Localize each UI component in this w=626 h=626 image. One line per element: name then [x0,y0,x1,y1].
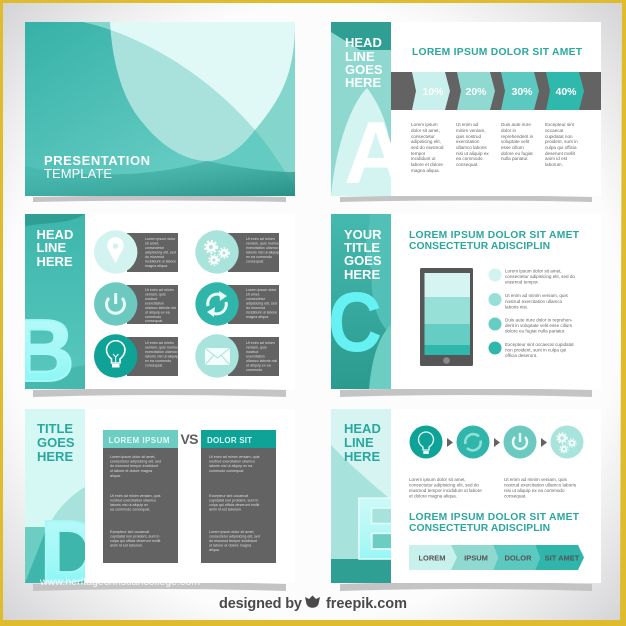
sidebar A [331,22,391,196]
comparison box: left: Ut enim ad minim veniam, quis [110,494,161,498]
column text A: nulla pariatur. [501,156,529,161]
legend list: nostrud exercitation ullamco [505,299,563,304]
item: mail: ullamco laboris nisi [246,359,277,363]
item: mail: ut aliquip ex ea [246,364,272,368]
column text A: consectetur [411,134,435,139]
item: refresh: magna aliqua. [246,315,269,319]
item: power: Ut enim ad minim [145,288,174,292]
item: settings: veniam, quis nostrud [246,242,280,246]
item: refresh: consectetur [246,297,266,301]
comparison box: left: cupidatat non proident, sunt in [110,534,159,538]
legend list: officia deserunt. [505,353,537,358]
column text A: labore et dolore [411,162,443,167]
legend list: Duis aute irure dolor in reprehen- [505,318,573,322]
chevron percentage band: 40% [555,86,577,98]
chevron percentage band [391,72,601,110]
item: settings: ex ea commodo [246,255,272,259]
item: power: nostrud [145,297,157,301]
paragraph text E: consectetur adipisicing elit, sed do [409,482,479,488]
legend list: eiusmod tempor. [505,280,539,284]
column text A: nisi ut aliquip ex [456,151,489,156]
comparison box: left: consectetur adipisicing elit, sed [110,460,161,464]
comparison box: right: do eiusmod tempor incididunt [209,539,257,543]
sidebar C: GOES [344,253,382,268]
sidebar A: GOES [345,62,383,77]
column text A: Lorem ipsum [411,122,438,127]
sidebar C: YOUR [344,227,382,242]
column text A: ea commodo [456,156,483,161]
comparison box: right: Excepteur sint occaecat [209,494,248,498]
sidebar A: A [344,103,408,202]
item: idea [94,334,179,378]
column text A: Ut enim ad [456,122,479,127]
column text A: dolor in [501,128,517,133]
item: power: ut aliquip ex ea [145,310,171,314]
sidebar D [25,409,85,583]
chevron percentage band: 10% [422,86,444,98]
column text A: dolore eu fugiat [501,151,533,156]
column text A: anim id est [545,156,568,161]
column text A: dolor sit amet, [411,128,440,133]
sidebar B: HEAD [36,227,73,242]
legend list: dolore eu fugiat nulla pariatur. [505,328,566,334]
heading E [409,512,580,534]
item: settings: laboris nisi ut aliquip [246,250,279,254]
item: location: sit amet, [145,242,159,246]
sidebar B: HERE [36,254,73,269]
panel shadow: cover [33,196,286,202]
panel: slide D [25,409,276,583]
comparison box: left: do eiusmod tempor incididunt [110,464,158,468]
paragraph text E: Lorem ipsum dolor sit amet, [409,477,466,482]
legend list: derit in voluptate velit esse cillum [505,323,572,328]
sidebar D: HERE [37,449,73,464]
sidebar A: HERE [345,75,381,90]
comparison box: right: cupidatat non proident, sunt in [209,498,258,502]
comparison box: left: Excepteur sint occaecat [110,530,149,534]
comparison box: left: anim id est laborum. [110,544,143,548]
legend list: laboris nisi. [505,304,528,310]
column text A: culpa qui officia [545,145,577,150]
heading E: LOREM IPSUM DOLOR SIT AMET [409,512,580,523]
heading E: CONSECTETUR ADISCIPLIN [409,523,550,534]
chevron percentage band: 30% [511,86,533,98]
heading C: CONSECTETUR ADISCIPLIN [409,241,550,252]
comparison box: right: Ut enim ad minim veniam, quis [209,455,260,459]
comparison box: left: laboris nisi ut aliquip ex [110,503,148,507]
panel shadow: C [340,388,592,397]
sidebar C [328,214,391,389]
legend list: non proident, sunt in culpa qui [505,348,566,352]
sidebar D: GOES [37,435,75,450]
item: mail: veniam, quis [246,346,267,350]
footer credit: freepik.com [326,596,407,612]
column text A: quis nostrud [456,134,481,139]
comparison box: left: ut labore et dolore magna [110,469,153,473]
paragraph text E: Ut enim ad minim veniam, quis [504,477,568,482]
column text A: adipisicing elit, [411,139,441,144]
sidebar E: LINE [344,435,374,450]
item: refresh [195,282,279,326]
sidebar B: LINE [36,240,66,255]
sidebar B: B [11,301,75,400]
comparison box: left: LOREM IPSUM [108,436,170,445]
paragraph text E: eiusmod tempor incididunt ut labore [409,488,482,493]
item: refresh: sit amet, [246,292,260,296]
sidebar C: TITLE [344,240,380,255]
footer credit [219,596,407,612]
column text A: reprehenderit in [501,134,534,139]
heading A: LOREM IPSUM DOLOR SIT AMET [412,47,583,58]
column text A: consequat. [456,162,478,167]
item: mail: commodo. [246,368,263,372]
item: settings: exercitation ullamco [246,246,279,250]
comparison box: right: aliqua. [209,548,220,552]
cover title: PRESENTATION [44,153,150,168]
item: location: incididunt ut labore [145,260,176,264]
chevron process bar: IPSUM [464,554,488,562]
column text A: sed do eiusmod [411,145,444,150]
item: power: commodo [145,315,161,319]
legend list: consectetur adipisicing elit, sed do [505,274,575,279]
item: power: ullamco laboris nisi [145,306,176,310]
item: location: magna aliqua. [145,264,168,268]
panel: slide C [328,214,601,389]
panel: slide E [331,409,601,583]
column text A: exercitation [456,139,480,144]
heading C [409,230,580,252]
item: power: exercitation [145,302,164,306]
process icons row [410,426,584,458]
panel shadow: A [340,196,592,202]
comparison box: right: ut labore et dolore magna [209,544,252,548]
column text A: laborum. [545,162,563,167]
column text A: deserunt mollit [545,151,576,156]
comparison box: left [103,430,178,563]
column text A: esse cillum [501,145,524,150]
paragraph text E: consequat. [504,494,526,498]
sidebar A: HEAD [345,35,382,50]
paragraph text E: nisi ut aliquip ex ea commodo [504,488,565,493]
panel shadow: B [33,388,286,397]
footer credit: designed by [219,596,302,612]
column text A: cupidatat non [545,134,573,139]
column text A: incididunt ut [411,156,436,161]
item: location [94,230,178,274]
comparison box: right: nostrud exercitation ullamco [209,460,255,464]
column text A: voluptate velit [501,139,530,144]
item: power [94,282,178,326]
sidebar E [331,409,391,583]
sidebar E: E [353,479,412,578]
item: mail: Ut enim ad minim [246,341,275,345]
sidebar C: HERE [344,267,380,282]
cover title: TEMPLATE [44,166,112,181]
item: idea: veniam, quis nostrud [145,346,179,350]
item: power: veniam, quis [145,292,166,296]
chevron process bar: DOLOR [504,554,532,562]
item: idea: laboris nisi ut aliquip [145,354,178,358]
item: idea: exercitation ullamco [145,350,178,354]
comparison box: left: aliqua. [110,474,121,478]
comparison box: left: culpa qui officia deserunt mollit [110,539,160,543]
legend list [488,268,575,358]
legend list: Ut enim ad minim veniam, quis [505,293,569,298]
item: refresh: adipisicing elit, sed [246,302,277,306]
cover title [44,156,150,178]
item: settings [195,230,280,274]
paragraph text E [409,477,577,498]
comparison box: right: culpa qui officia deserunt mollit [209,503,259,507]
comparison box: left: ea commodo consequat. [110,508,150,512]
comparison box: right: laboris nisi ut aliquip ex ea [209,464,253,468]
sidebar B [25,214,85,389]
paragraph text E: nostrud exercitation ullamco laboris [504,482,577,488]
panel: cover slide [25,22,295,196]
panel shadow: D [33,582,286,591]
comparison box: left: Lorem ipsum dolor sit amet, [110,455,156,459]
comparison box: left: nostrud exercitation ullamco [110,498,156,502]
column text A: proident, sunt in [545,139,578,144]
watermark: www.heritagechristiancollege.com [39,576,200,588]
panel: slide A [331,22,601,202]
item: mail [195,334,279,378]
chevron process bar: LOREM [418,554,446,562]
item: settings: consequat. [246,260,264,264]
item: power: consequat. [145,319,163,323]
item: idea: consequat. [145,364,163,368]
comparison box: right: anim id est laborum. [209,508,242,512]
column text A: minim veniam, [456,128,486,133]
legend list: Lorem ipsum dolor sit amet, [505,268,562,274]
comparison box: right [201,430,276,563]
column text A [411,122,578,173]
item: settings: Ut enim ad minim [246,237,275,241]
item: location: Lorem ipsum dolor [145,237,176,241]
column text A: ullamco laboris [456,145,487,150]
sidebar D: D [40,502,104,601]
comparison box: right: consectetur adipisicing elit, sed [209,534,260,538]
panel shadow: E [340,582,592,591]
panel: slide B [25,214,280,389]
chevron process bar: SIT AMET [545,554,580,562]
sidebar E: HEAD [344,421,381,436]
comparison box: right: Lorem ipsum dolor sit amet, [209,530,254,534]
sidebar E: HERE [344,449,380,464]
item: idea: ex ea commodo [145,359,171,363]
item: location: consectetur [145,246,165,250]
icon: tablet chart [420,268,473,366]
column text A: magna aliqua. [411,168,440,173]
chevron percentage band: 20% [465,86,487,98]
sidebar A: LINE [345,49,375,64]
column text A: Excepteur sint [545,122,575,127]
icon: freepik crown [305,596,320,608]
legend list: Excepteur sint occaecat cupidatat [505,342,574,347]
item: location: adipisicing elit, sed [145,250,176,254]
item: mail: nostrud [246,350,258,354]
column text A: Duis aute irure [501,122,531,127]
item: mail: exercitation [246,354,265,358]
vs label: VS [180,431,198,447]
heading C: LOREM IPSUM DOLOR SIT AMET [409,230,580,241]
column text A: occaecat [545,128,564,133]
item: refresh: incididunt ut labore [246,310,277,314]
item: location: do eiusmod [145,255,164,259]
chevron process bar [409,545,584,570]
comparison box: right: commodo consequat. [209,469,244,473]
sidebar C: C [328,275,382,369]
item: idea: Ut enim ad minim [145,341,174,345]
column text A: tempor [411,151,426,156]
sidebar D: TITLE [37,421,73,436]
item: refresh: Lorem ipsum dolor [246,288,277,292]
comparison box: right: DOLOR SIT [207,436,252,445]
paragraph text E: et dolore magna aliqua. [409,494,457,498]
item: refresh: do eiusmod [246,306,265,310]
